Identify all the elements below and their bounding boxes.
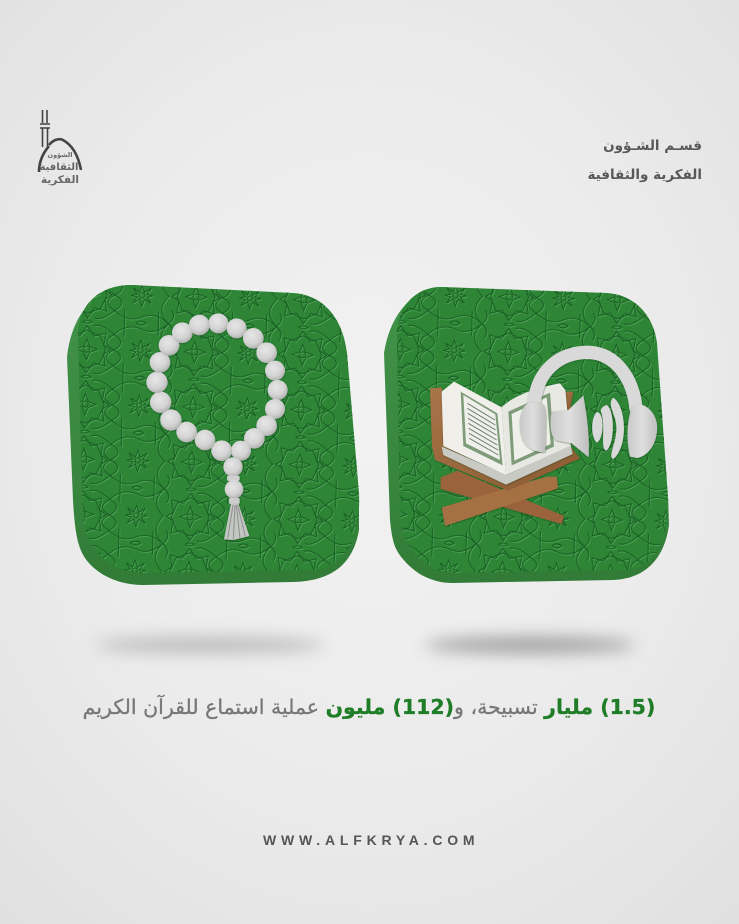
tile side: [384, 287, 669, 583]
logo calligraphy: الثقافية: [40, 162, 78, 173]
panel: prayer beads tile: [67, 285, 359, 585]
headphones band: [534, 352, 636, 408]
logo calligraphy: الشؤون: [48, 151, 72, 159]
minaret: [40, 110, 50, 147]
left ear cup: [520, 403, 546, 452]
logo: [39, 110, 81, 186]
icon: prayer beads: [146, 313, 288, 540]
logo calligraphy: [40, 151, 79, 186]
tile arabesque pattern: [78, 285, 359, 573]
panel: Quran audio tile: [384, 287, 669, 583]
speaker: [551, 395, 589, 457]
tile face: [397, 287, 668, 573]
sound waves: [592, 398, 624, 459]
right ear cup: [627, 404, 657, 458]
beads ring: [146, 313, 288, 461]
floor shadow right: [425, 637, 635, 653]
tile face: [78, 285, 359, 573]
wooden stand: [430, 387, 580, 526]
tile arabesque pattern: [397, 287, 668, 573]
department heading: [587, 138, 702, 183]
main statement: (1.5) مليار تسبيحة، و(112) مليون عملية استماع للقرآن الكريم: [83, 695, 655, 719]
department heading: قسـم الشـؤون: [603, 138, 702, 154]
dome: [39, 139, 81, 172]
icon: Quran on wooden stand with headphones: [430, 352, 657, 526]
website url: WWW.ALFKRYA.COM: [263, 832, 479, 848]
tassel and end beads: [223, 457, 249, 540]
logo calligraphy: الفكرية: [41, 174, 79, 186]
floor shadow left: [95, 637, 325, 653]
tile side: [67, 285, 359, 585]
open book: [442, 382, 573, 485]
department heading: الفكرية والثقافية: [587, 167, 702, 183]
